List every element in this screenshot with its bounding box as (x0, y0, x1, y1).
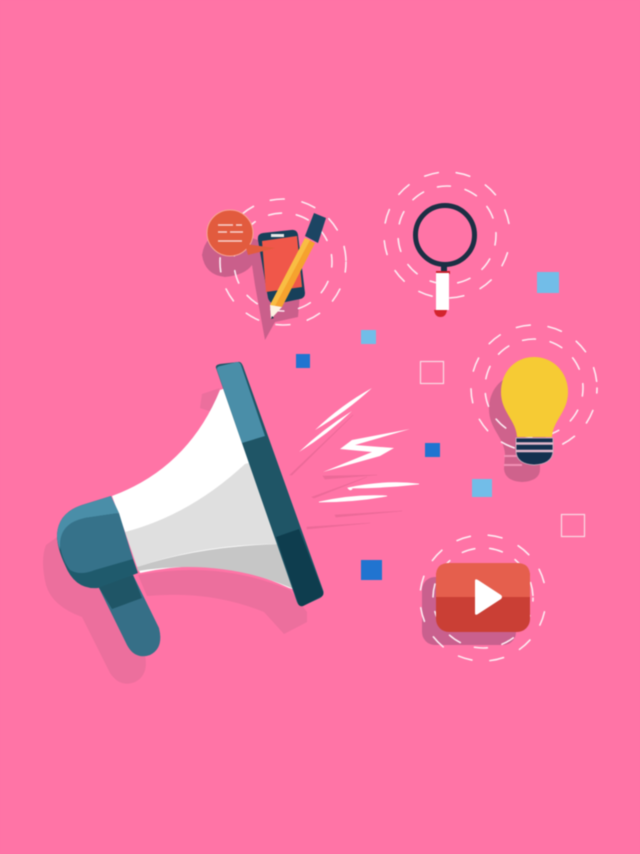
square: dark blue large (361, 560, 382, 580)
square: hollow right (562, 514, 584, 536)
icon: phone, pencil and speech bubble (202, 199, 346, 340)
megaphone (43, 362, 324, 684)
icon: magnifying glass (384, 172, 510, 317)
square: light blue small (361, 330, 376, 344)
icon: video play button (420, 535, 546, 661)
icon: light bulb (471, 325, 597, 482)
sound spark lines (290, 388, 419, 529)
square: dark blue small (296, 354, 310, 368)
square: dark blue middle (425, 443, 440, 457)
square: light blue lower (472, 479, 492, 497)
square: hollow centre (420, 362, 444, 384)
square: light blue upper right (537, 272, 559, 293)
